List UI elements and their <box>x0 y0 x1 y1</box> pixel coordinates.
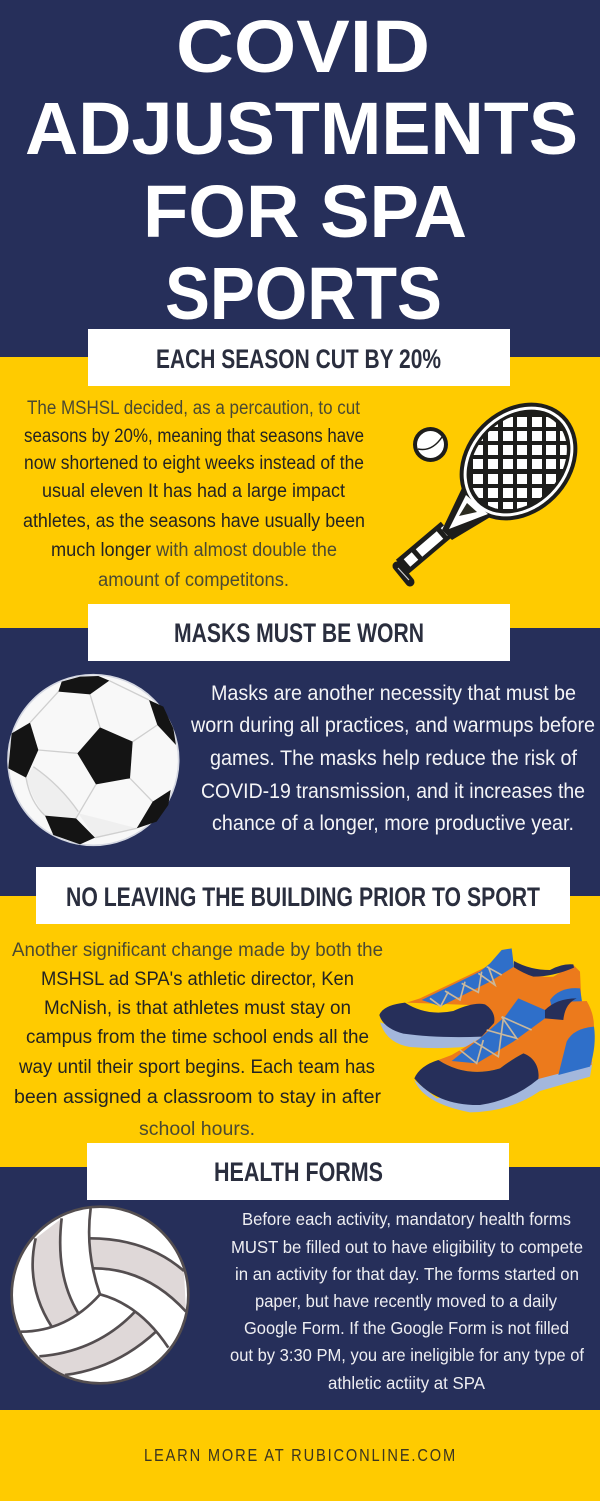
heading box <box>87 1143 509 1200</box>
text block: Google Form. If the Google Form is not filled <box>244 1318 569 1338</box>
panel: masks must be worn <box>0 604 600 896</box>
icon: volleyball <box>12 1207 188 1383</box>
title: SPORTS <box>165 252 442 335</box>
text block: chance of a longer, more productive year. <box>212 812 574 835</box>
text block: McNish, is that athletes must stay on <box>44 998 351 1019</box>
text block: out by 3:30 PM, you are ineligible for any type of <box>230 1345 584 1365</box>
text block: been assigned a classroom to stay in after <box>14 1087 382 1108</box>
heading box: HEALTH FORMS <box>214 1157 383 1187</box>
text block: amount of competitons. <box>98 570 289 591</box>
title <box>25 5 578 335</box>
text block: much longer with almost double the <box>51 540 337 561</box>
text block <box>190 682 595 835</box>
text block: paper, but have recently moved to a daily <box>255 1291 557 1311</box>
icon: soccer ball <box>8 675 179 845</box>
text block: Masks are another necessity that must be <box>211 682 576 705</box>
icon: tennis racket and ball <box>392 402 578 586</box>
panel: each season cut by 20% <box>0 329 600 628</box>
title panel <box>0 0 600 357</box>
heading box <box>36 867 570 924</box>
text block: in an activity for that day. The forms started on <box>235 1264 579 1284</box>
title: FOR SPA <box>143 170 467 253</box>
text block: now shortened to eight weeks instead of the <box>24 453 364 474</box>
text block: athletic actiity at SPA <box>328 1373 485 1393</box>
heading box: EACH SEASON CUT BY 20% <box>156 344 441 374</box>
footer text: LEARN MORE AT RUBICONLINE.COM <box>144 1445 457 1465</box>
panel: no leaving the building prior to sport <box>0 867 600 1167</box>
icon: running shoes <box>379 948 595 1112</box>
heading box <box>88 329 510 386</box>
text block: seasons by 20%, meaning that seasons have <box>24 426 364 447</box>
text block: Another significant change made by both the <box>12 940 383 961</box>
text block: usual eleven It has had a large impact <box>42 481 346 502</box>
text block: Before each activity, mandatory health forms <box>242 1209 571 1229</box>
text block <box>230 1209 584 1393</box>
text block: campus from the time school ends all the <box>26 1027 369 1048</box>
heading box <box>88 604 510 661</box>
heading box: MASKS MUST BE WORN <box>174 618 424 648</box>
text block: way until their sport begins. Each team has <box>18 1057 375 1078</box>
text block: MUST be filled out to have eligibility to compete <box>231 1237 583 1257</box>
text block <box>12 940 383 1140</box>
text block: games. The masks help reduce the risk of <box>210 747 577 770</box>
text block: athletes, as the seasons have usually been <box>23 511 365 532</box>
text block: The MSHSL decided, as a percaution, to cut <box>27 398 361 419</box>
title: ADJUSTMENTS <box>25 87 578 170</box>
footer band <box>0 1410 600 1501</box>
text block: school hours. <box>139 1119 255 1140</box>
text block: MSHSL ad SPA's athletic director, Ken <box>41 969 354 990</box>
title: COVID <box>176 5 430 88</box>
text block <box>23 398 365 591</box>
panel: health forms <box>0 1143 600 1410</box>
